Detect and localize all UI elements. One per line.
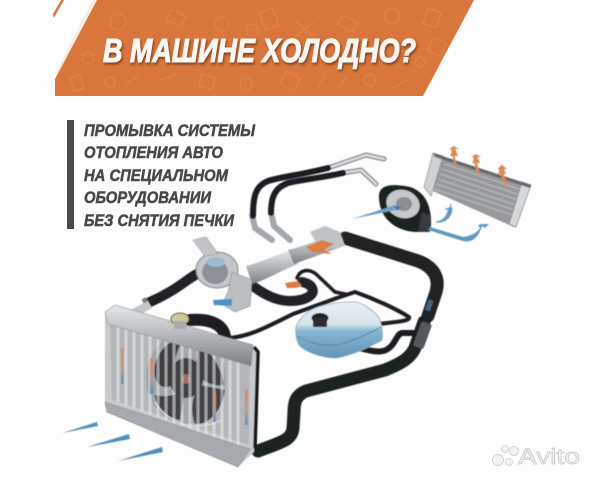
text block: description [84,121,256,230]
pipes: heater silver tubes [252,155,384,240]
heater core [424,153,531,227]
radiator [105,305,258,467]
banner: orange header [53,0,474,96]
hose: connector to lower radiator [258,322,424,451]
hose: big return hose [345,238,437,316]
arrows: blue airflow into radiator [62,422,163,461]
logo: Avito watermark [492,444,580,469]
text block: description: НА СПЕЦИАЛЬНОМ [84,166,229,185]
text block: description: ОБОРУДОВАНИИ [84,188,212,207]
text block: description: БЕЗ СНЯТИЯ ПЕЧКИ [84,211,235,230]
logo: Avito watermark: Avito [518,444,580,469]
accent bar [67,120,74,229]
arrows: blue airflow at blower [352,204,489,241]
hose: pump to radiator [150,272,201,302]
hose: lower pump hose [250,282,313,301]
radiator heat indicators [121,348,248,425]
text block: description: ПРОМЫВКА СИСТЕМЫ [84,121,256,140]
arrows: orange heat above heater [449,146,509,190]
hoses: heater black hoses [253,168,343,216]
text block: description: ОТОПЛЕНИЯ АВТО [84,143,223,162]
fan blades [146,332,226,424]
hose: thin hoses around tank [230,271,413,352]
diagram: cooling and heating system [62,146,531,467]
banner pattern: faint icons [70,8,446,91]
water pump and valve housing [193,226,345,312]
blower motor [379,185,431,232]
expansion tank [296,302,382,358]
title: В МАШИНЕ ХОЛОДНО? [103,32,416,69]
